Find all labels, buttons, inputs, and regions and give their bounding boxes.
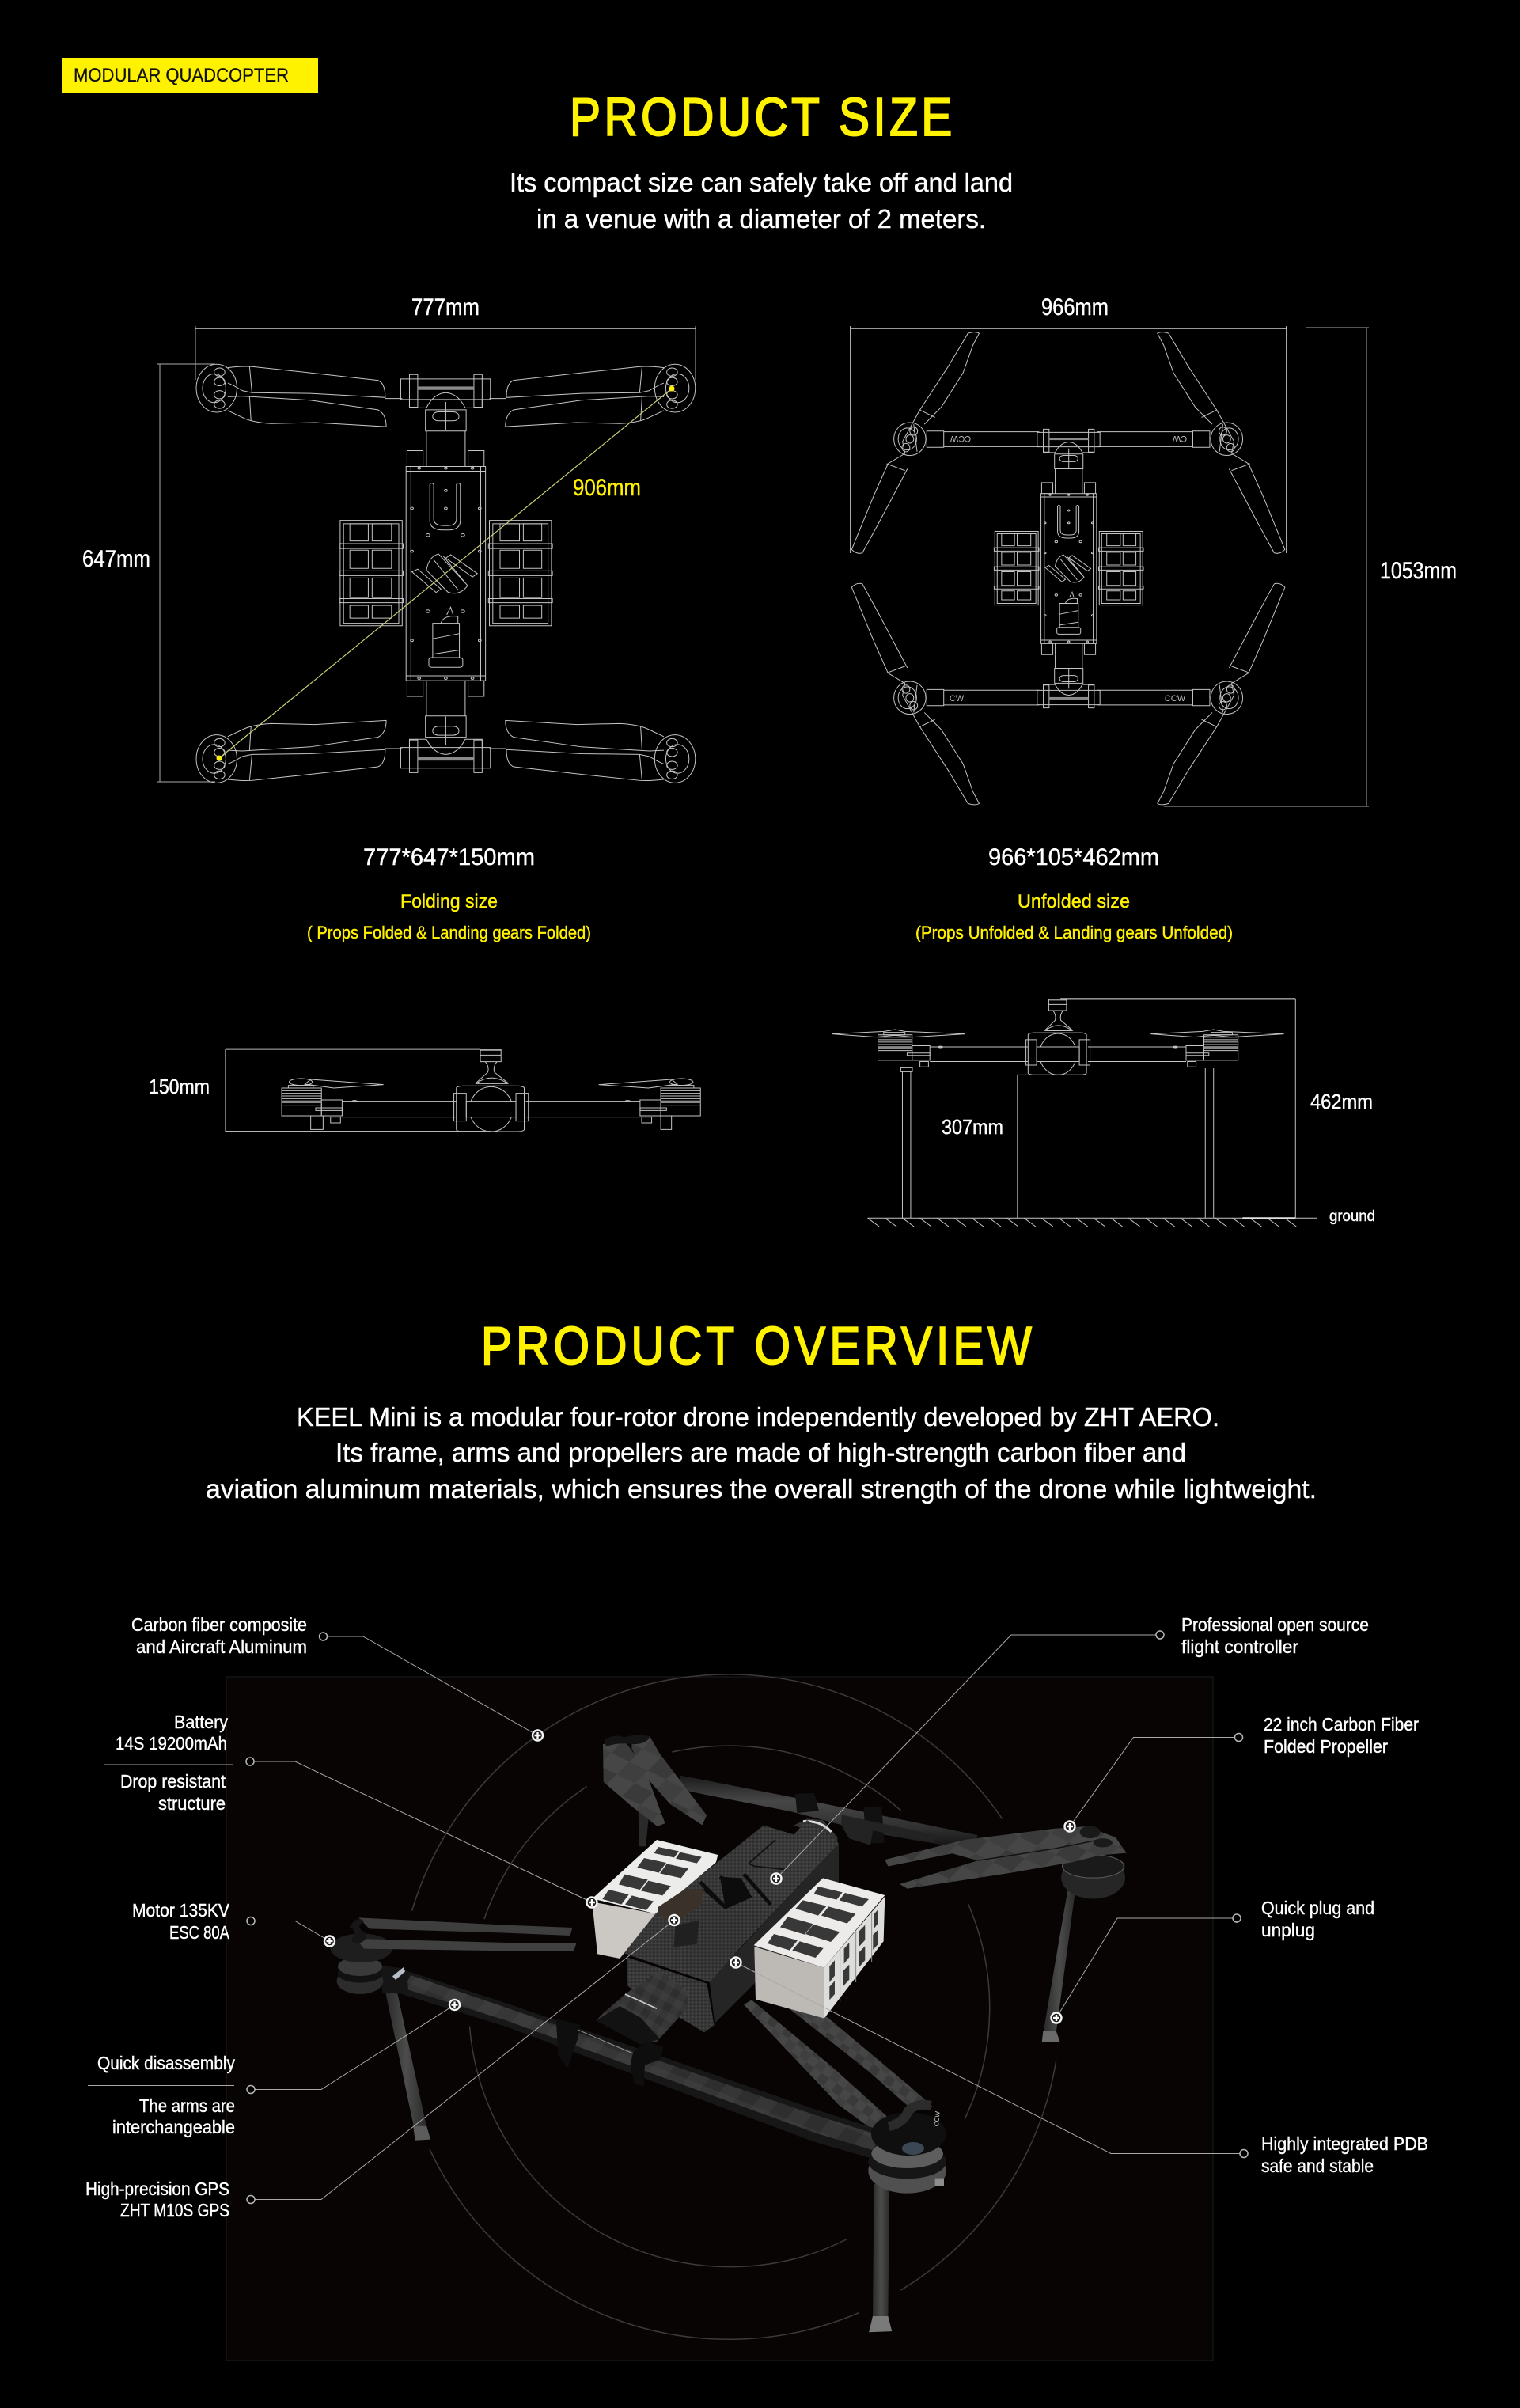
callout: battery and drop resistant structure: structure	[158, 1793, 226, 1814]
GPS module	[658, 1889, 704, 1947]
text block: product overview intro: Its frame, arms and propellers are made of high-strength carbon fiber and	[335, 1438, 1186, 1467]
label: 462mm: 462mm	[1310, 1090, 1373, 1113]
arm markings	[950, 434, 1187, 703]
drone: folded front propeller behind battery	[744, 1985, 932, 2134]
label: 647mm: 647mm	[82, 546, 150, 572]
drone: front left motor and propeller	[330, 1917, 576, 1994]
callout: integrated PDB: Highly integrated PDB	[1261, 2133, 1428, 2154]
callout: flight controller: flight controller	[1181, 1636, 1298, 1657]
callout: battery and drop resistant structure	[104, 1712, 597, 1907]
caption: unfolded size: Unfolded size	[1018, 891, 1130, 912]
callout: flight controller	[771, 1614, 1369, 1883]
callout: carbon fiber composite: Carbon fiber composite	[131, 1614, 307, 1635]
label: 1053mm: 1053mm	[1380, 558, 1457, 584]
arm markings: CCW	[1165, 694, 1186, 703]
callout: folded propeller	[1065, 1714, 1419, 1831]
diagram: folded side view	[149, 1049, 700, 1132]
caption: folding size: Folding size	[400, 891, 498, 912]
diagram: unfolded drone top view	[850, 294, 1457, 806]
caption: unfolded size: (Props Unfolded & Landing gears Unfolded)	[915, 923, 1233, 942]
callout: battery and drop resistant structure: 14S 19200mAh	[116, 1733, 227, 1754]
decorative concentric arcs	[412, 1674, 1056, 2339]
callout: folded propeller: Folded Propeller	[1264, 1736, 1388, 1757]
leader lines and markers	[85, 1614, 1428, 2220]
label: 777mm: 777mm	[411, 294, 480, 320]
badge: modular quadcopter	[62, 58, 318, 93]
panel: drone photo backdrop	[226, 1677, 1213, 2361]
callout: quick disassembly: interchangeable	[112, 2117, 235, 2137]
callout: carbon fiber composite: and Aircraft Aluminum	[136, 1636, 307, 1657]
callout: high precision GPS	[85, 1915, 679, 2220]
callout: flight controller: Professional open source	[1181, 1614, 1369, 1635]
text block: product size intro: Its compact size can safely take off and land	[510, 168, 1013, 197]
drone: front right motor and propeller hub: CCW	[933, 2110, 942, 2126]
caption: folding size: 777*647*150mm	[363, 844, 535, 870]
drone: central carbon body	[592, 1815, 934, 2045]
caption: folding size	[307, 844, 591, 942]
text block: product overview intro	[206, 1402, 1317, 1504]
arm markings: CCW	[950, 434, 971, 443]
callout: integrated PDB	[731, 1958, 1428, 2176]
callout: folded propeller: 22 inch Carbon Fiber	[1264, 1714, 1419, 1735]
callout: motor and ESC: ESC 80A	[169, 1922, 230, 1943]
diagram: unfolded side view	[832, 999, 1375, 1227]
heading: product overview: PRODUCT OVERVIEW	[481, 1317, 1032, 1376]
text block: product size intro	[510, 168, 1013, 233]
callout: battery and drop resistant structure: Drop resistant	[120, 1771, 226, 1792]
callout: motor and ESC	[132, 1900, 335, 1947]
drone: front right motor and propeller hub	[868, 2105, 946, 2194]
label: ground: ground	[1329, 1208, 1375, 1225]
callout: motor and ESC: Motor 135KV	[132, 1900, 230, 1921]
label: 307mm: 307mm	[942, 1115, 1003, 1139]
diagonal measure: 906mm	[217, 386, 674, 761]
heading: product size: PRODUCT SIZE	[570, 88, 952, 147]
arm markings: CW	[950, 694, 965, 703]
drone: front arm and legs	[385, 1970, 892, 2332]
callout: quick plug	[1051, 1898, 1374, 2023]
dimension lines: folded top view	[157, 326, 696, 782]
caption: unfolded size: 966*105*462mm	[988, 844, 1159, 870]
text block: product overview intro: KEEL Mini is a modular four-rotor drone independently developed by ZHT AERO.	[297, 1402, 1219, 1432]
callout: carbon fiber composite	[131, 1614, 543, 1741]
callout: quick plug: Quick plug and	[1261, 1898, 1374, 1918]
label: 150mm: 150mm	[149, 1075, 210, 1098]
callout: high precision GPS: ZHT M10S GPS	[120, 2200, 229, 2220]
diagram: folded drone top view	[82, 294, 696, 783]
callout: quick disassembly: Quick disassembly	[97, 2053, 235, 2073]
callout: quick plug: unplug	[1261, 1920, 1315, 1940]
photo: quadcopter drone	[330, 1735, 1127, 2332]
drone: front clamp	[578, 2030, 663, 2087]
label: 966mm: 966mm	[1041, 294, 1109, 320]
callout: quick disassembly: The arms are	[139, 2095, 235, 2116]
callout: battery and drop resistant structure: Battery	[174, 1712, 228, 1732]
arm markings: CW	[1172, 434, 1187, 443]
text block: product size intro: in a venue with a diameter of 2 meters.	[536, 204, 986, 233]
callout: high precision GPS: High-precision GPS	[85, 2179, 229, 2199]
callout: quick disassembly	[88, 2000, 460, 2137]
caption: unfolded size	[915, 844, 1233, 942]
diagonal measure: 906mm: 906mm	[573, 475, 641, 501]
drone: rear arm, propellers and leg	[603, 1735, 1127, 2042]
dimension lines: unfolded top view	[850, 326, 1369, 806]
caption: folding size: ( Props Folded & Landing gears Folded)	[307, 923, 591, 942]
badge: modular quadcopter: MODULAR QUADCOPTER	[74, 65, 289, 86]
left battery pack	[592, 1840, 718, 1959]
callout: integrated PDB: safe and stable	[1261, 2156, 1374, 2176]
right battery pack	[754, 1878, 885, 2019]
text block: product overview intro: aviation aluminum materials, which ensures the overall strength of the drone while lightweight.	[206, 1474, 1317, 1504]
